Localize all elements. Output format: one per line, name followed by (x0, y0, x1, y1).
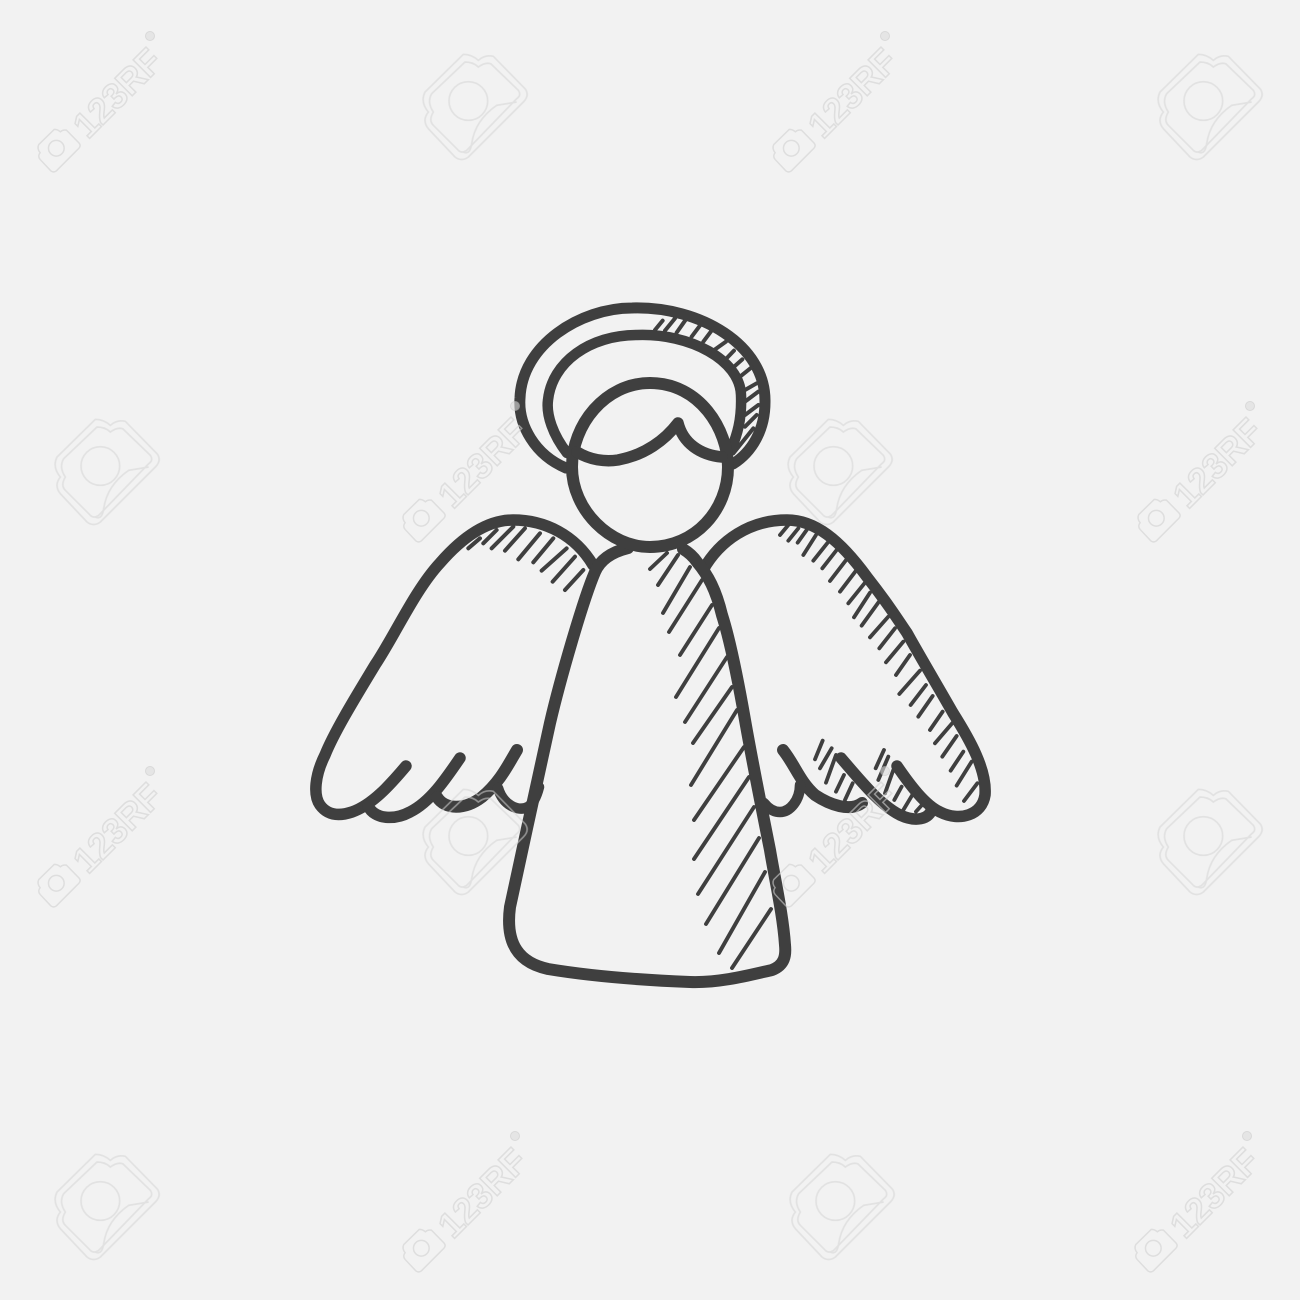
watermark: 123RF logos: 123RF (430, 410, 535, 516)
watermark: 123RF logos: 123RF (800, 775, 905, 881)
halo (520, 308, 765, 468)
hair (577, 423, 722, 461)
watermark: 123RF logos: 123RF (1162, 1140, 1267, 1246)
watermark: 123RF logos: 123RF (800, 40, 905, 146)
right wing (703, 520, 985, 819)
watermark: 123RF logos: 123RF (430, 1140, 535, 1246)
robe body (509, 548, 785, 982)
left wing (316, 520, 593, 817)
angel figure (316, 308, 985, 982)
watermark: 123RF logos: 123RF (1165, 410, 1270, 516)
watermark: 123RF logos: 123RF (65, 40, 170, 146)
head (572, 383, 728, 547)
watermark: 123RF logos: 123RF (65, 775, 170, 881)
